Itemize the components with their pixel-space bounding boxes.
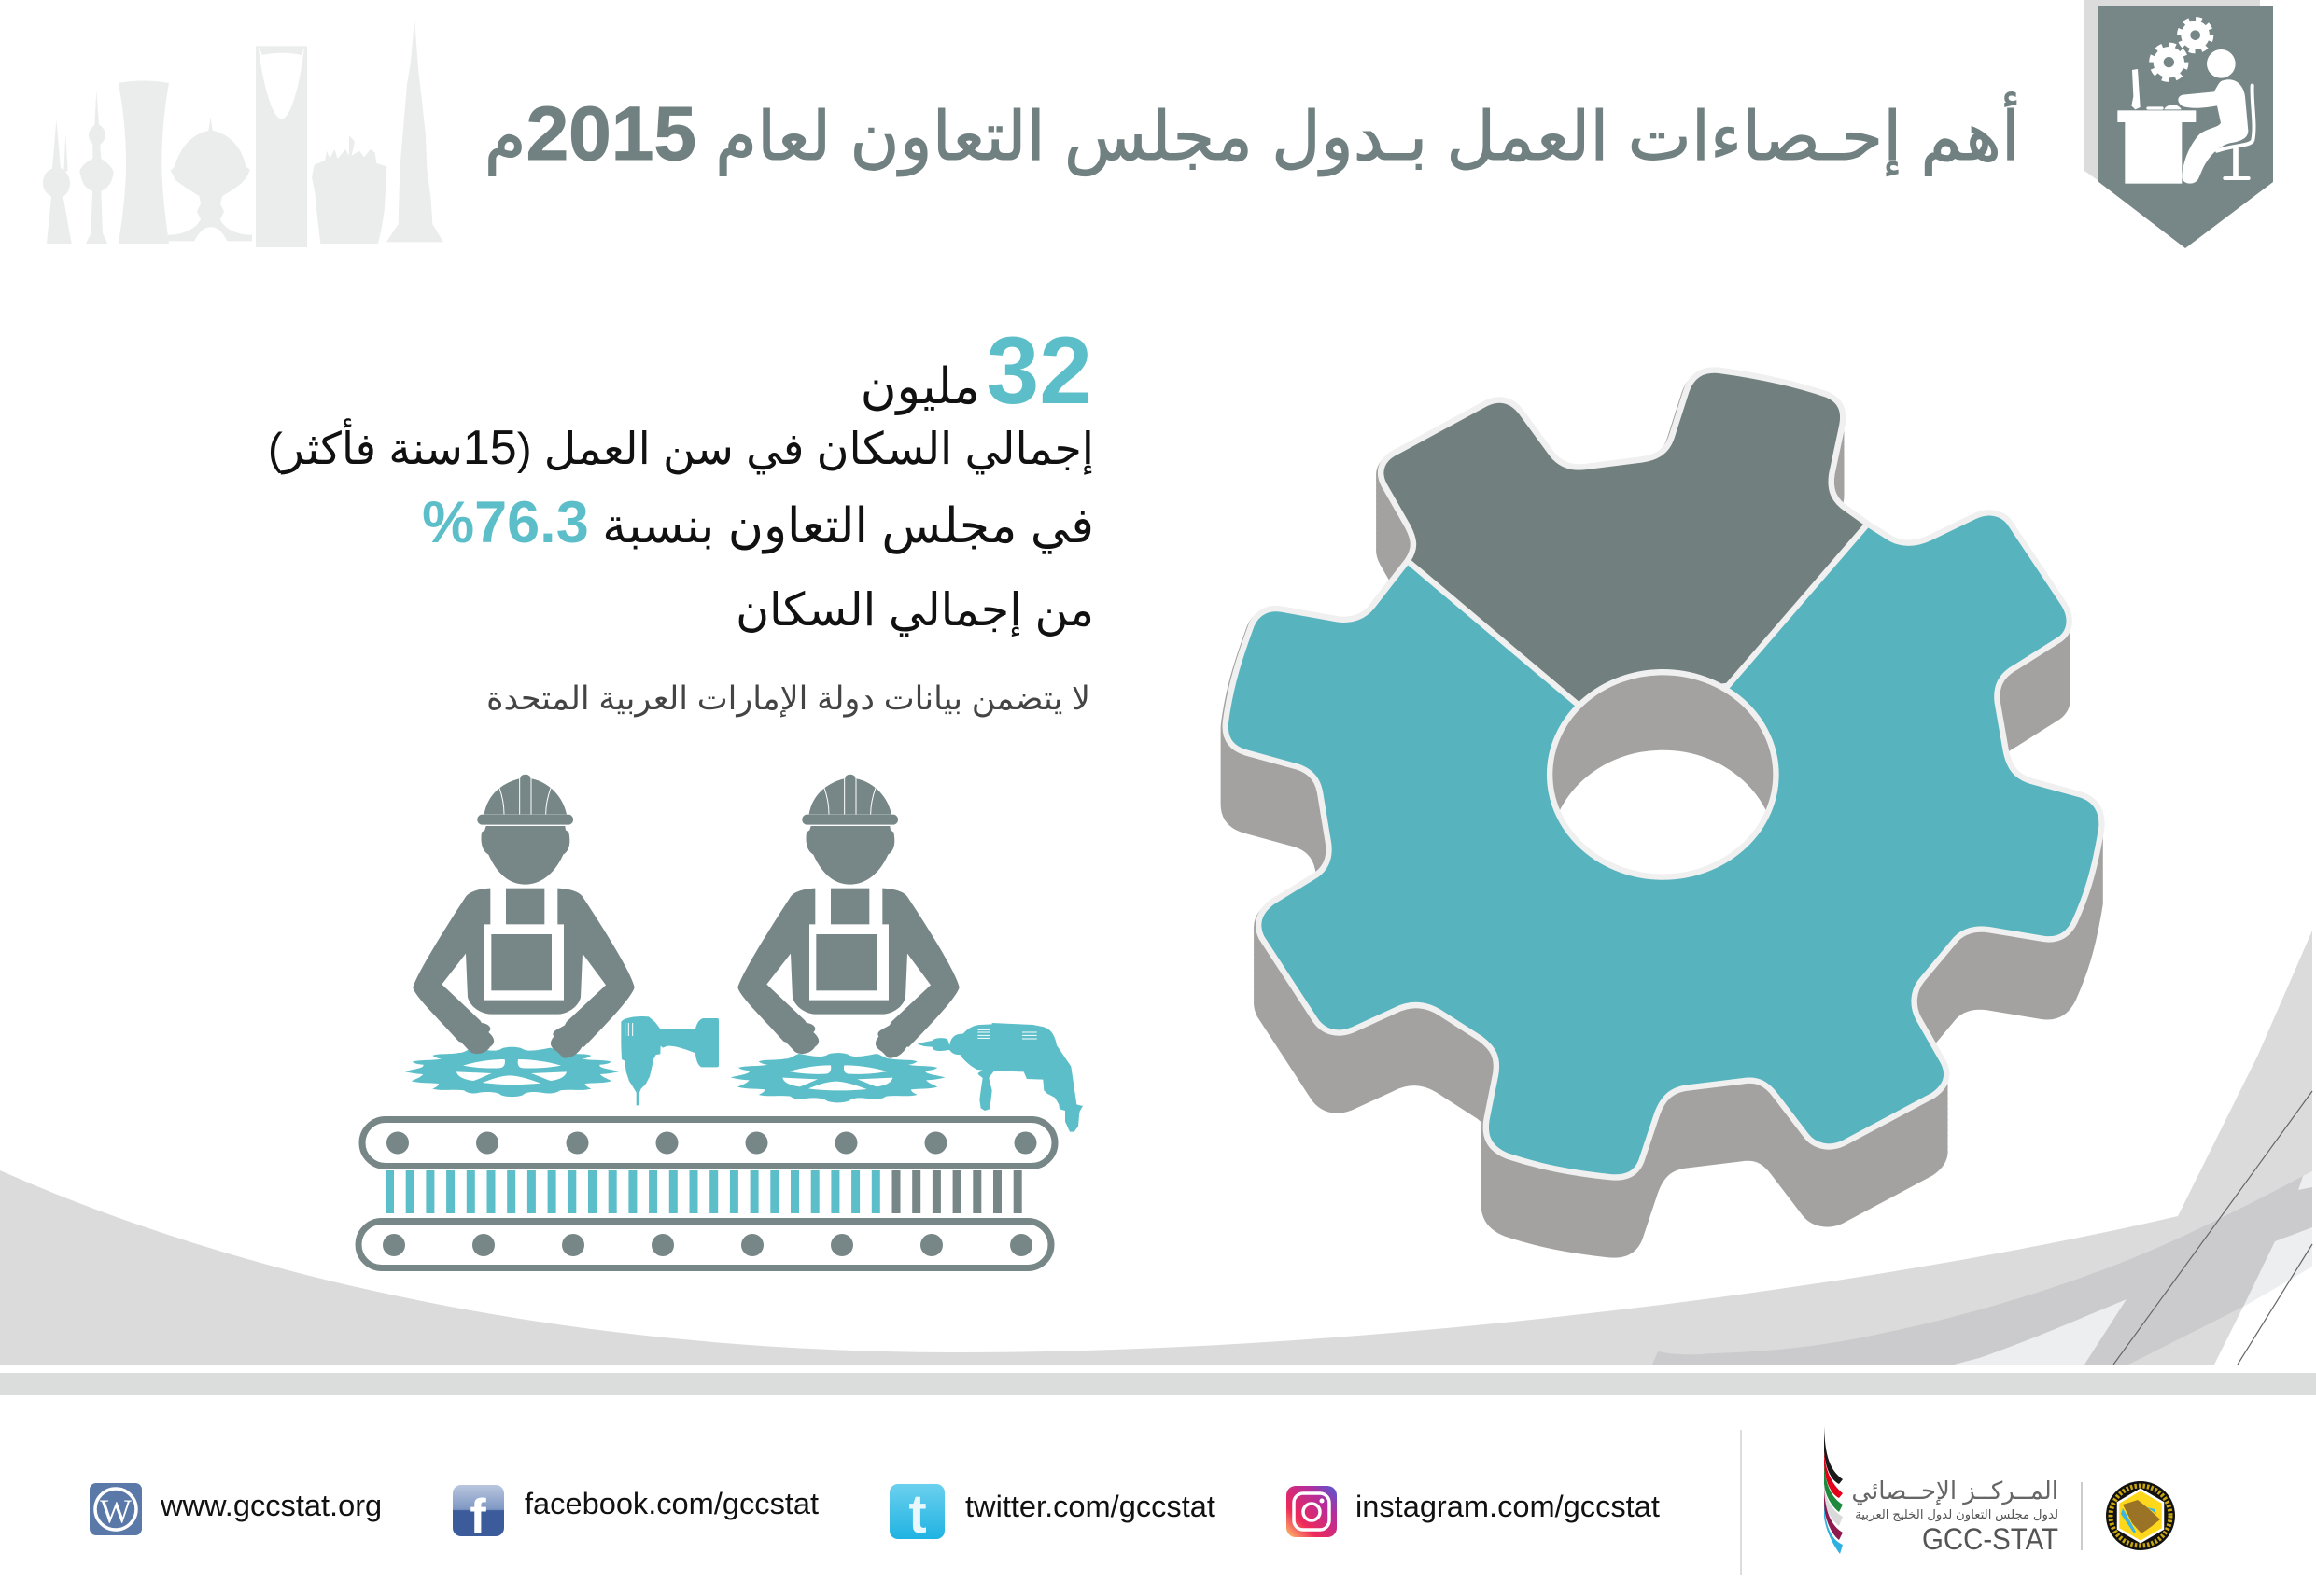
gear extrusion bbox=[1224, 372, 2100, 1254]
worker right bbox=[737, 775, 960, 1058]
icon: instagram bbox=[1286, 1486, 1337, 1537]
icon: hammer drill bbox=[918, 1023, 1083, 1132]
skyline of Gulf landmarks bbox=[43, 19, 443, 247]
icon: twitter: t bbox=[908, 1484, 927, 1545]
text: GCC share: في مجلس التعاون بنسبة %76.3 bbox=[422, 490, 1094, 555]
logo Arabic name: المــركــز الإحــصائي bbox=[1851, 1477, 2058, 1505]
conveyor belt top bbox=[362, 1120, 1055, 1167]
text: working age population: إجمالي السكان في سن العمل (15سنة فأكثر) bbox=[268, 421, 1094, 475]
icon: worker at desk with gears bbox=[2117, 19, 2253, 184]
cog on the right bench bbox=[731, 1053, 946, 1102]
background swoosh: pale band bbox=[2243, 1227, 2312, 1307]
footer band bbox=[0, 1373, 2316, 1395]
header badge bbox=[2084, 0, 2273, 248]
gear centre hole bbox=[1546, 669, 1779, 880]
GCC emblem bbox=[2106, 1481, 2175, 1550]
conveyor belt bottom bbox=[358, 1221, 1051, 1267]
icon: twitter bbox=[890, 1484, 945, 1545]
headline: 32 million: 32 مليون bbox=[861, 317, 1092, 424]
gear top face: grey share bbox=[1381, 371, 1868, 706]
link: website: www.gccstat.org bbox=[161, 1488, 382, 1522]
link: instagram: instagram.com/gccstat bbox=[1355, 1489, 1660, 1523]
cog on the left bench bbox=[404, 1047, 619, 1097]
workers illustration bbox=[358, 775, 1083, 1267]
background swoosh: darker grey bbox=[1652, 1176, 2312, 1365]
background swoosh: light grey bbox=[0, 931, 2312, 1365]
logo divider bbox=[2081, 1482, 2083, 1550]
logo ribbon bbox=[1824, 1426, 1843, 1554]
conveyor bars grey bbox=[892, 1170, 1033, 1213]
link: facebook: facebook.com/gccstat bbox=[525, 1486, 819, 1520]
background swoosh: pale sliver bbox=[2298, 1171, 2312, 1190]
icon: wordpress bbox=[90, 1483, 142, 1535]
gear top face: teal share 76.3% bbox=[1226, 371, 2102, 1178]
header shadow bbox=[355, 192, 1848, 308]
worker left bbox=[413, 775, 635, 1058]
icon: facebook bbox=[453, 1485, 504, 1544]
link: twitter: twitter.com/gccstat bbox=[965, 1489, 1215, 1523]
background swoosh: white corner bbox=[2214, 1267, 2312, 1365]
thin lines bbox=[2113, 1091, 2312, 1365]
conveyor bars teal bbox=[386, 1170, 891, 1213]
note: excludes UAE: لا يتضمن بيانات دولة الإمارات العربية المتحدة bbox=[486, 680, 1090, 717]
footer divider bbox=[1740, 1430, 1742, 1575]
text: of total population: من إجمالي السكان bbox=[736, 585, 1094, 636]
3D gear chart bbox=[1224, 371, 2102, 1254]
icon: wordpress: W bbox=[100, 1492, 132, 1530]
GCC-STAT wordmark: GCC-STAT bbox=[1922, 1522, 2058, 1556]
icon: facebook: f bbox=[470, 1490, 486, 1544]
background swoosh: pale triangle bbox=[1954, 1299, 2127, 1365]
icon: cordless drill bbox=[621, 1016, 719, 1105]
logo Arabic subtitle: لدول مجلس التعاون لدول الخليج العربية bbox=[1855, 1507, 2058, 1521]
title: أهم إحـصاءات العمل بـدول مجلس التعاون لعام 2015م bbox=[484, 91, 2020, 176]
